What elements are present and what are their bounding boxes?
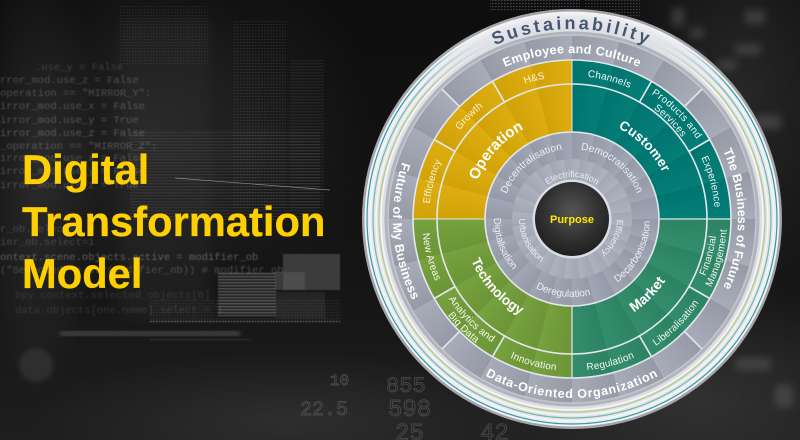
background: code text and data texture: irror_mod.use_x = False (0, 153, 145, 165)
market labels: Management (705, 229, 727, 287)
label: Sustainability: Sustainability (492, 16, 650, 46)
title: Model (22, 250, 142, 297)
background: code text and data texture: irror_mod.use_y = False (0, 166, 145, 178)
customer labels: Channels (588, 70, 631, 88)
background: code text and data texture: 598 (388, 397, 431, 424)
background: code text and data texture: ontext.scene.objects.active = modifier_ob (0, 252, 258, 264)
title (22, 146, 325, 297)
market labels: Market (628, 276, 666, 312)
background: code text and data texture: r_ob.select=1 (0, 224, 82, 236)
operation labels: Efficiency (423, 159, 442, 203)
background: code text and data texture: _operation == "MIRROR_Z": (0, 141, 158, 153)
inner drivers labels: Electrification (544, 170, 598, 184)
background: code text and data texture: 10 (330, 372, 349, 390)
panel: market quadrant (572, 219, 731, 378)
technology labels: New Areas (422, 233, 440, 280)
title: Transformation (22, 198, 325, 245)
customer labels: Customer (620, 122, 670, 170)
label: The Business of Future: The Business of Future (724, 147, 746, 289)
technology labels: Analytics and (448, 297, 496, 342)
background: code text and data texture: bpy.context.selected_objects[0] (15, 290, 210, 302)
operation labels: H&S (524, 72, 544, 84)
technology labels: Technology (472, 256, 524, 315)
outer rim: Sustainability band (362, 9, 782, 429)
market labels: Liberalisation (652, 300, 698, 346)
ring: inner drivers outer band (485, 132, 659, 306)
market labels (586, 229, 727, 370)
ring: inner drivers inner band (512, 159, 632, 279)
title: Digital (22, 146, 149, 193)
customer labels (588, 70, 720, 207)
panel: customer quadrant (572, 60, 731, 219)
operation labels: Growth (456, 104, 483, 129)
inner drivers labels: Decentralisation (500, 144, 562, 194)
background: code text and data texture: irror_mod.use_x = False (0, 101, 145, 113)
inner drivers labels: Digitalisation (492, 218, 516, 270)
label: Purpose: Purpose (550, 214, 594, 226)
background: code text and data texture: ("Selected" + str(modifier_ob)) # modifier ob (0, 265, 284, 277)
customer labels: Products and (652, 88, 702, 139)
background: code text and data texture: irror_mod.use_y = True (0, 115, 139, 127)
background: code text and data texture: operation == "MIRROR_Y": (0, 88, 151, 100)
inner drivers labels (492, 142, 650, 298)
label: Employee and Culture: Employee and Culture (502, 44, 640, 67)
inner drivers labels: Efficiency (602, 220, 624, 256)
market labels: Regulation (586, 353, 634, 370)
background: code text and data texture: .use_y = False (35, 62, 123, 74)
background: code text and data texture: 22.5 (300, 399, 348, 422)
background: code text and data texture: 855 (386, 374, 426, 399)
background: code text and data texture: data.objects[one.name].select = 1 (15, 305, 223, 317)
hub: purpose (535, 182, 609, 256)
technology labels (422, 233, 556, 370)
diagram: digital transformation wheel (362, 9, 782, 429)
background: code text and data texture: rror_mod.use_z = False (0, 75, 139, 87)
panel: technology quadrant (413, 219, 572, 378)
label: Data-Oriented Organization: Data-Oriented Organization (486, 368, 658, 399)
background: code text and data texture: irror_mod.use_z = False (0, 128, 145, 140)
technology labels: Big Data (448, 312, 478, 344)
background: code text and data texture: ier_ob.select=1 (0, 237, 95, 249)
panel: operation quadrant (413, 60, 572, 219)
technology labels: Innovation (510, 352, 556, 370)
customer labels: Services (654, 104, 686, 136)
inner drivers labels: Urbanisation (519, 219, 543, 262)
operation labels: Operation (470, 123, 523, 178)
label: Future of My Business: Future of My Business (391, 162, 418, 300)
inner drivers labels: Deregulation (536, 282, 590, 298)
market labels: Financial (699, 236, 716, 276)
labels and divider lines (387, 16, 757, 404)
background: code text and data texture: irror_mod.use_z = True (0, 180, 139, 192)
operation labels (423, 72, 544, 203)
customer labels: Experience (702, 156, 720, 207)
inner drivers labels: Decarbonisation (614, 221, 650, 282)
inner drivers labels: Democratisation (582, 142, 642, 193)
ring: business context segments (388, 35, 756, 403)
